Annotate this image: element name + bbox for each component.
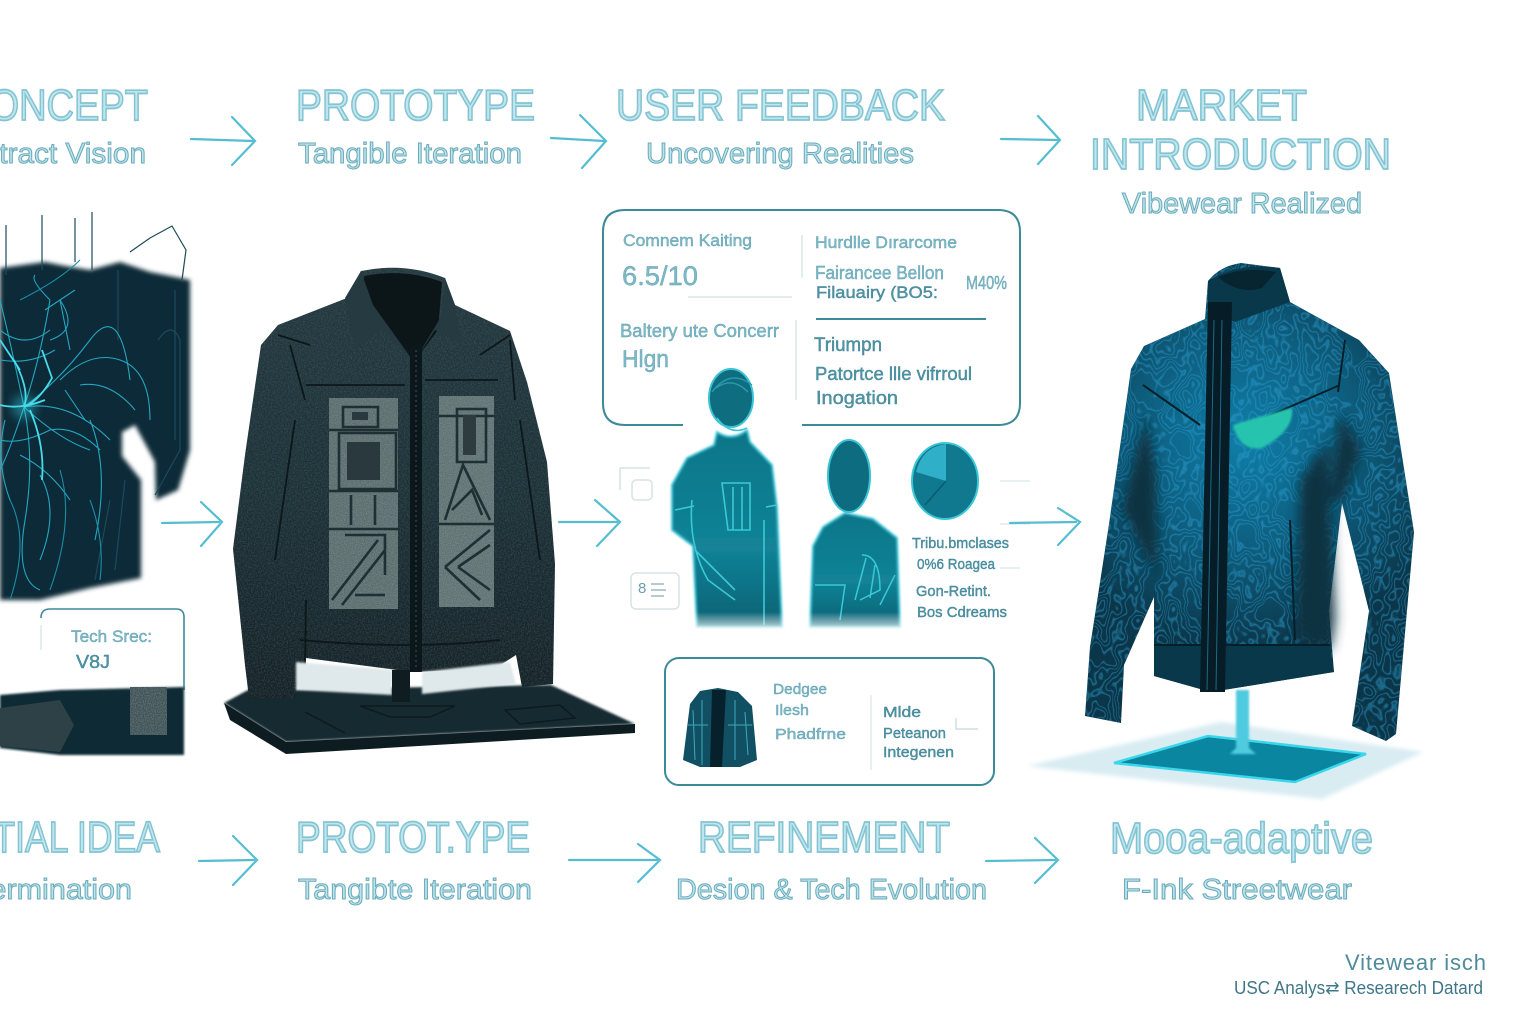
figure: user front	[672, 369, 790, 634]
arrow: feedback to market	[1010, 508, 1080, 545]
heading: market introduction	[1090, 81, 1391, 220]
panel: refinement card: Ilesh	[775, 702, 809, 719]
collar interior	[362, 273, 442, 362]
heading: refinement	[676, 813, 987, 906]
arrow: prototype to refinement	[569, 844, 660, 882]
figure: user back	[803, 440, 907, 634]
text: pie notes: Gon-Retint.	[916, 583, 991, 600]
panel: feedback card	[603, 210, 1020, 425]
panel: feedback card: Inogation	[816, 388, 898, 408]
small ghost icons beside figures: 8	[638, 580, 646, 597]
glowing chest patch	[1233, 408, 1292, 449]
panel: tech spec card: V8J	[76, 652, 110, 672]
circuit panel left	[329, 398, 398, 609]
heading: mood-adaptive	[1110, 814, 1373, 906]
heading: user feedback: USER FEEDBACK	[616, 81, 945, 130]
arrow: initial idea to prototype	[199, 836, 257, 885]
heading: prototype lower	[296, 813, 532, 906]
heading: user feedback	[616, 81, 945, 170]
heading: initial idea	[0, 813, 161, 906]
prototype leather jacket	[233, 268, 555, 702]
panel: feedback card: 6.5/10	[622, 261, 698, 291]
heading: refinement: REFINEMENT	[698, 813, 950, 862]
heading: refinement: Desion & Tech Evolution	[676, 874, 987, 906]
heading: user feedback: Uncovering Realities	[646, 138, 914, 170]
panel: tech spec card	[0, 609, 184, 755]
dark bottom strip	[0, 687, 184, 755]
heading: mood-adaptive: Mooa-adaptive	[1110, 814, 1373, 863]
arrow: jacket to feedback	[559, 500, 620, 546]
icon: small jacket	[683, 688, 757, 767]
panel: refinement card: Peteanon	[883, 725, 946, 742]
text: pie notes	[912, 481, 1030, 621]
arrow: prototype to user feedback	[551, 115, 606, 168]
zipper	[410, 345, 422, 672]
panel: feedback card: Comnem Kaiting	[623, 231, 752, 250]
source credit: Vitewear isch	[1345, 950, 1486, 975]
heading: market introduction: MARKET	[1136, 81, 1307, 130]
arrow: user feedback to market	[1001, 116, 1060, 164]
concept artwork: dark fabric with neural lines	[0, 212, 190, 600]
panel: refinement card: Integenen	[883, 744, 954, 761]
heading: prototype	[296, 81, 535, 170]
heading: prototype: PROTOTYPE	[296, 81, 535, 130]
panel: feedback card: Baltery ute Concerr	[620, 321, 779, 341]
panel: feedback card: Hlgn	[622, 346, 669, 373]
source credit: USC Analys⇄ Researech Datard	[1234, 978, 1483, 998]
panel: refinement card: Dedgee	[773, 681, 827, 698]
prototype platform base	[224, 685, 635, 754]
seams and zipper	[1143, 340, 1345, 645]
panel: feedback card: M40%	[966, 273, 1007, 293]
small ghost icons beside figures	[620, 468, 679, 609]
collar flaps	[345, 271, 462, 362]
chart: satisfaction pie	[912, 443, 978, 519]
arrow: concept to prototype	[191, 117, 255, 165]
text: pie notes: Tribu.bmclases	[912, 535, 1009, 552]
arrow: concept artwork to jacket	[162, 502, 222, 546]
panel: feedback card: Filauairy (BO5:	[816, 283, 938, 302]
heading: mood-adaptive: F-Ink Streetwear	[1122, 874, 1352, 906]
source credit	[1234, 950, 1486, 998]
panel: feedback card: Hurdlle Dırarcome	[815, 233, 957, 252]
heading: prototype lower: Tangibte Iteration	[298, 874, 532, 906]
text: pie notes: Bos Cdreams	[917, 604, 1007, 621]
heading: prototype: Tangible Iteration	[298, 138, 522, 170]
hem and collar	[1154, 267, 1334, 692]
heading: market introduction: Vibewear Realized	[1122, 188, 1362, 220]
text: pie notes: 0%6 Roagea	[917, 556, 996, 573]
heading: market introduction: INTRODUCTION	[1090, 130, 1391, 179]
platform: glowing base	[1027, 690, 1423, 799]
stand and gap	[296, 662, 516, 695]
panel: tech spec card: Tech Srec:	[71, 627, 152, 646]
heading: prototype lower: PROTOT.YPE	[296, 813, 530, 862]
panel: refinement card: Phadfrne	[775, 726, 846, 743]
panel: refinement card	[665, 658, 994, 785]
arrow: refinement to mood-adaptive	[986, 838, 1058, 883]
panel: feedback card: Fairancee Bellon	[815, 263, 944, 283]
circuit panel right	[439, 396, 494, 607]
panel: feedback card: Patortce llle vifrroul	[815, 364, 972, 384]
panel: refinement card: Mlde	[883, 704, 921, 721]
dark side panels	[1122, 410, 1362, 650]
heading: concept	[0, 81, 148, 170]
market jacket	[1085, 263, 1414, 741]
panel: feedback card: Triumpn	[814, 335, 882, 356]
